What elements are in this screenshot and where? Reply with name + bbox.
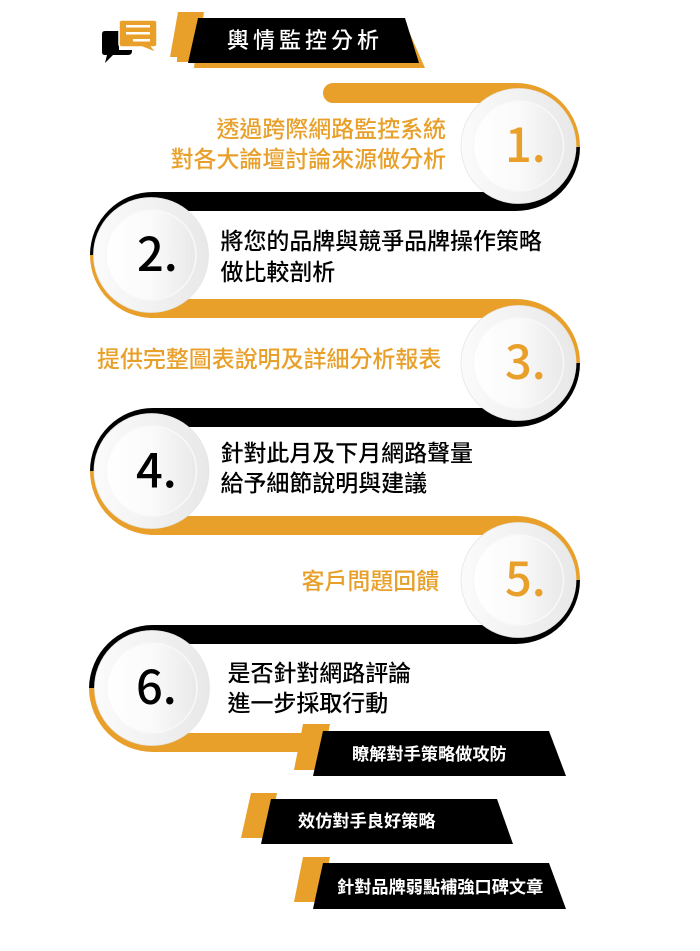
step 1 badge	[461, 88, 576, 204]
step 2 badge	[94, 198, 208, 312]
step 2 text: 將您的品牌與競爭品牌操作策略	[220, 228, 542, 254]
step 6 badge	[94, 630, 210, 746]
track: step 2 connector	[90, 192, 300, 318]
step 6 text	[228, 660, 411, 716]
ribbon: 針對品牌弱點補強口碑文章	[294, 857, 566, 909]
step 4 text: 針對此月及下月網路聲量	[220, 440, 473, 466]
step 1 text	[171, 116, 446, 172]
track: step 1 connector	[170, 83, 580, 211]
ribbon: 瞭解對手策略做攻防: 瞭解對手策略做攻防	[352, 744, 507, 764]
step 5 badge: 5.	[505, 541, 546, 610]
step 2 text: 做比較剖析	[220, 259, 335, 285]
step 6 text: 進一步採取行動	[228, 690, 388, 716]
step 1 badge: 1.	[505, 107, 546, 176]
step 6 badge: 6.	[136, 649, 177, 718]
ribbon: 效仿對手良好策略	[241, 793, 513, 844]
ribbon: 效仿對手良好策略: 效仿對手良好策略	[298, 811, 436, 831]
step 1 text: 透過跨際網路監控系統	[216, 116, 446, 142]
track: step 3 connector	[150, 299, 580, 427]
step 3 text: 提供完整圖表說明及詳細分析報表	[97, 346, 441, 372]
ribbon: 針對品牌弱點補強口碑文章: 針對品牌弱點補強口碑文章	[337, 877, 543, 897]
track: step 5 connector	[150, 516, 580, 644]
step 5 text: 客戶問題回饋	[302, 568, 439, 594]
step 4 text: 給予細節說明與建議	[220, 470, 427, 496]
step 1 text: 對各大論壇討論來源做分析	[171, 146, 446, 172]
step 4 badge	[94, 414, 209, 528]
ribbon: 瞭解對手策略做攻防	[294, 724, 566, 776]
step 2 text	[220, 228, 542, 285]
icon: chat bubbles	[102, 20, 157, 63]
title banner	[170, 12, 425, 68]
step 2 badge: 2.	[137, 216, 178, 285]
track: step 6 connector	[89, 625, 305, 752]
track: step 4 connector	[90, 408, 300, 535]
step 5 badge	[461, 522, 576, 638]
step 3 badge: 3.	[505, 324, 546, 393]
title: 輿情監控分析	[227, 28, 383, 53]
step 4 text	[220, 440, 473, 496]
step 6 text: 是否針對網路評論	[228, 660, 411, 686]
step 4 badge: 4.	[136, 432, 177, 502]
step 3 badge	[461, 306, 576, 420]
